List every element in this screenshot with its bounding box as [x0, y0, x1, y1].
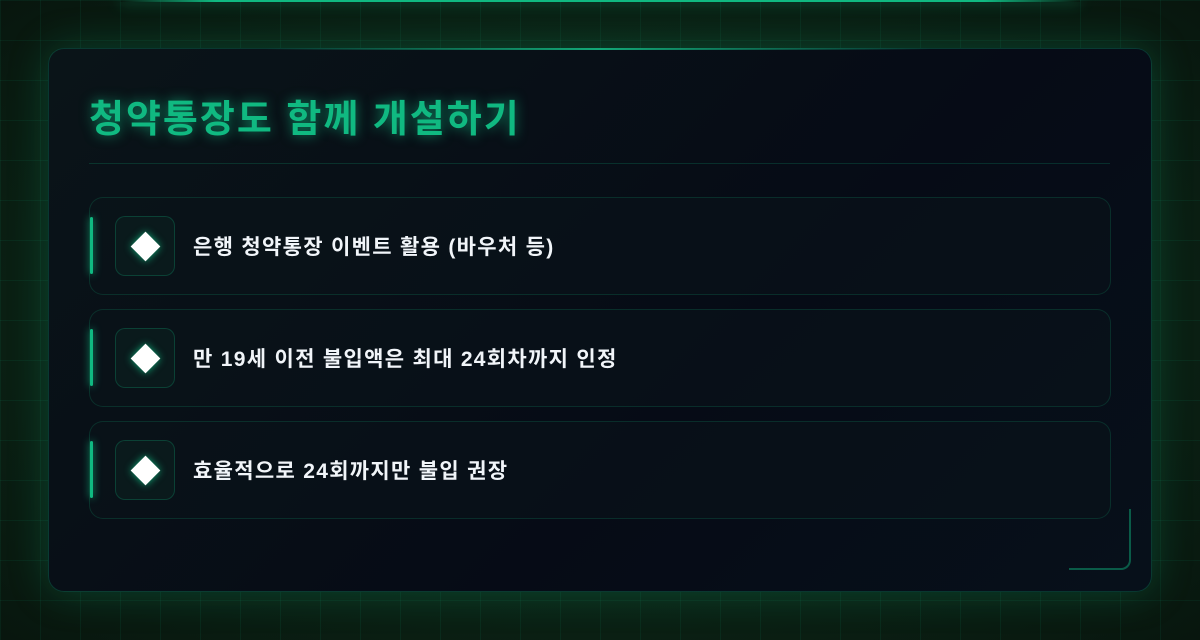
text: item 3: 효율적으로 24회까지만 불입 권장	[193, 460, 508, 483]
icon: diamond	[115, 440, 175, 500]
title: 청약통장도 함께 개설하기	[89, 99, 521, 141]
text: item 1: 은행 청약통장 이벤트 활용 (바우처 등)	[193, 236, 555, 259]
item 2	[89, 309, 1111, 407]
item 1	[89, 197, 1111, 295]
icon: diamond	[115, 216, 175, 276]
panel: main card	[48, 48, 1152, 592]
icon: diamond	[115, 328, 175, 388]
text: item 2: 만 19세 이전 불입액은 최대 24회차까지 인정	[193, 348, 618, 371]
item 3	[89, 421, 1111, 519]
